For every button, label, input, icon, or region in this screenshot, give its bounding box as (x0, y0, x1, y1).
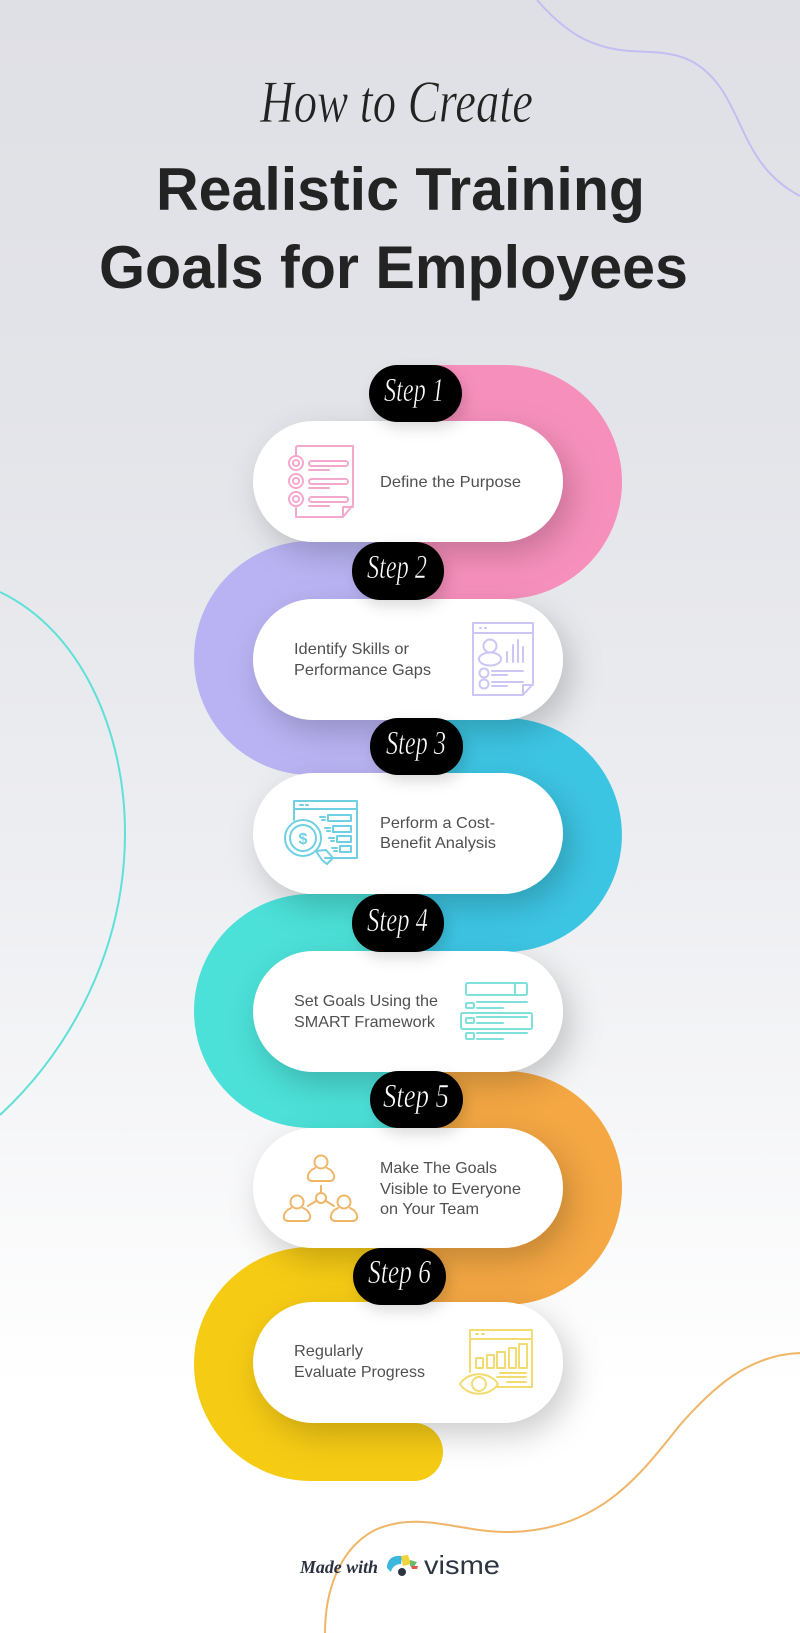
badge 2 (352, 542, 444, 600)
ribbon: blue (400, 718, 622, 952)
step 4 (253, 894, 563, 1072)
step 3 (253, 718, 563, 894)
text 4: Set Goals Using the (294, 993, 438, 1010)
card 4 (253, 951, 563, 1072)
decorative curve: teal arc left (0, 592, 125, 1115)
badge label 4: Step 4 (367, 902, 428, 939)
text 2: Identify Skills or (294, 641, 410, 658)
icon: dashboard with eye (460, 1330, 532, 1394)
card 2 (253, 599, 563, 720)
heading line 2: Goals for Employees (99, 234, 688, 301)
badge 5 (370, 1071, 463, 1128)
text 5: Make The Goals (380, 1160, 497, 1177)
step 1 (253, 365, 563, 542)
badge 1 (369, 365, 462, 422)
icon: cost analysis magnifier: $ (299, 831, 308, 848)
icon: team network (284, 1156, 357, 1221)
ribbon: teal (194, 894, 420, 1128)
badge label 5: Step 5 (383, 1078, 449, 1115)
text 4 (294, 993, 438, 1031)
card 6 (253, 1302, 563, 1423)
badge label 3: Step 3 (386, 725, 446, 762)
text 6: Regularly (294, 1343, 363, 1360)
icon: profile report (473, 623, 533, 695)
badge label 2: Step 2 (367, 549, 427, 586)
card 3 (253, 773, 563, 894)
text 3: Perform a Cost- (380, 815, 495, 832)
card 1 (253, 421, 563, 542)
icon: cost analysis magnifier (285, 801, 357, 864)
text 1: Define the Purpose (380, 474, 521, 491)
text 2 (294, 641, 431, 679)
text 3: Benefit Analysis (380, 835, 496, 852)
text 5: Visible to Everyone (380, 1181, 521, 1198)
icon: document list (289, 446, 353, 517)
badge label 1: Step 1 (384, 372, 444, 409)
subtitle: How to Create: How to Create (259, 69, 533, 135)
ribbon: orange (400, 1071, 622, 1305)
footer: made with visme (299, 1550, 500, 1580)
title (99, 69, 688, 301)
card 5 (253, 1128, 563, 1248)
badge 6 (353, 1248, 446, 1305)
visme wordmark: visme (424, 1550, 500, 1580)
step 5 (253, 1071, 563, 1248)
badge 3 (370, 718, 463, 775)
ribbon: yellow (194, 1247, 443, 1481)
ribbon: purple (194, 541, 420, 775)
text 5 (380, 1160, 521, 1218)
heading line 1: Realistic Training (156, 156, 645, 223)
text 2: Performance Gaps (294, 662, 431, 679)
text 5: on Your Team (380, 1201, 479, 1218)
step 2 (253, 542, 563, 720)
badge label 6: Step 6 (368, 1254, 431, 1291)
text 3 (380, 815, 496, 852)
icon: goals list (461, 983, 532, 1039)
step 6 (253, 1248, 563, 1423)
decorative curve: orange bottom (325, 1353, 800, 1633)
text 6 (294, 1343, 425, 1381)
text 6: Evaluate Progress (294, 1364, 425, 1381)
text 4: SMART Framework (294, 1014, 436, 1031)
logo mark (387, 1555, 418, 1576)
badge 4 (352, 894, 444, 952)
made with label: Made with (299, 1557, 378, 1577)
decorative curve: purple top right (537, 0, 800, 196)
ribbon: pink (400, 365, 622, 599)
